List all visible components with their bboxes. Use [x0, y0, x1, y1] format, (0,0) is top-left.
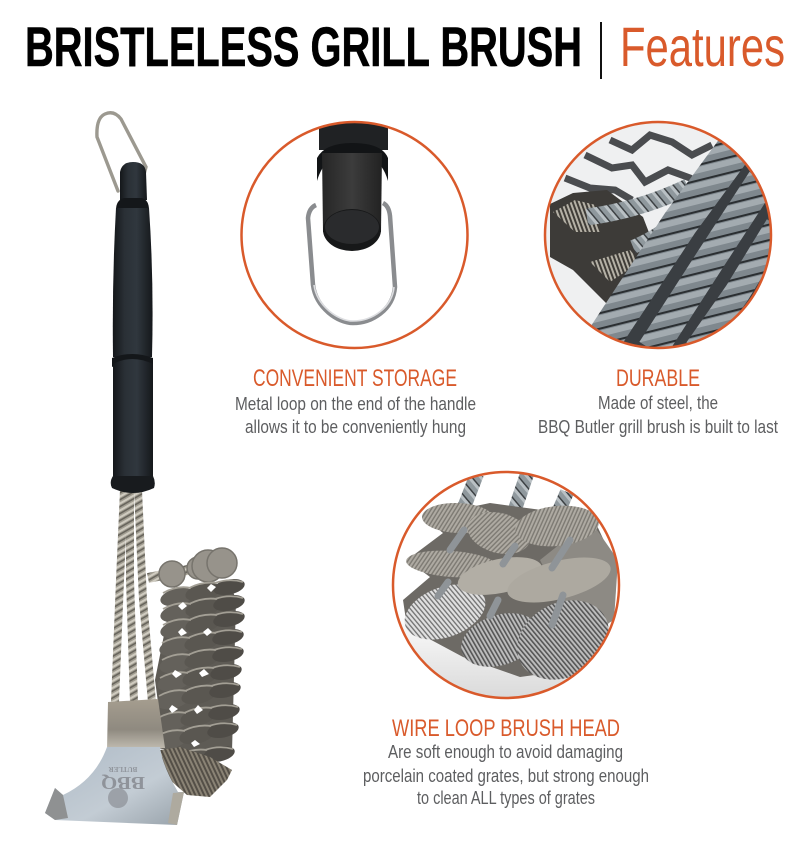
scraper plate neck [107, 699, 165, 750]
heading: WIRE LOOP BRUSH HEAD [392, 715, 620, 742]
heading: DURABLE [616, 365, 700, 392]
brush hanging loop [97, 113, 146, 191]
description [235, 394, 476, 437]
brush mesh balls [159, 548, 237, 587]
handle [120, 162, 147, 200]
panel: wire loop brush head [363, 470, 649, 808]
description: Metal loop on the end of the handle [235, 394, 476, 414]
circular photo: handle loop [240, 120, 470, 350]
panel: durable [538, 118, 778, 437]
panel: convenient storage [235, 120, 476, 437]
description [363, 742, 649, 808]
scraper plate blade [45, 747, 184, 825]
grill brush product image [45, 113, 246, 825]
description: to clean ALL types of grates [417, 788, 595, 808]
brush bottom coil [160, 747, 232, 797]
brush coil rows [148, 576, 246, 776]
circular photo: twisted steel ropes [540, 118, 778, 353]
brush wires [115, 490, 222, 702]
title: product name: BRISTLELESS GRILL BRUSH [25, 15, 582, 78]
circular photo: wire loops [390, 470, 623, 702]
description [538, 393, 778, 437]
plate logo text: BUTLER [108, 765, 137, 773]
title [25, 15, 785, 79]
description: porcelain coated grates, but strong enough [363, 766, 649, 786]
heading: CONVENIENT STORAGE [253, 365, 457, 392]
plate logo emblem [108, 788, 128, 808]
description: allows it to be conveniently hung [245, 417, 466, 437]
description: Are soft enough to avoid damaging [388, 742, 623, 762]
plate logo text: BBQ [101, 773, 145, 793]
plate logo text [101, 765, 145, 793]
description: Made of steel, the [598, 393, 718, 413]
